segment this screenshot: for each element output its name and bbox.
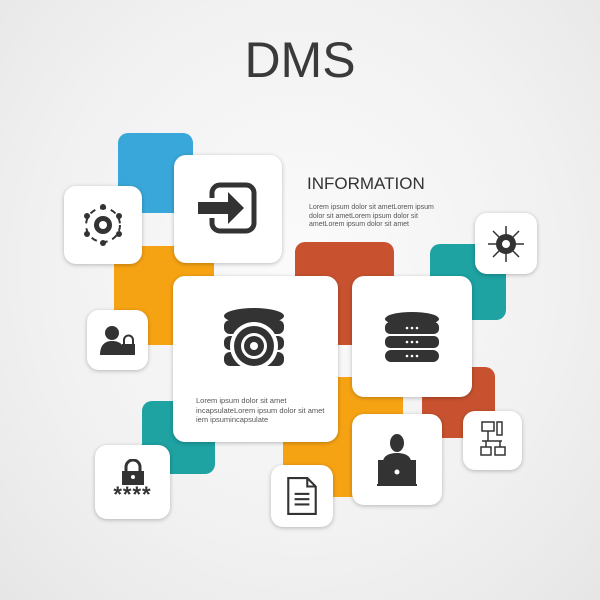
block: teal right <box>430 244 506 320</box>
card: user lock <box>87 310 148 370</box>
block: red top <box>295 242 394 345</box>
card: password lock: **** <box>113 482 152 507</box>
card: main with db gear <box>173 276 338 442</box>
block: teal bottom <box>142 401 215 474</box>
card: password lock <box>95 445 170 519</box>
text: main body: Lorem ipsum dolor sit amet incapsulateLorem ipsum dolor sit amet iem ipsumincapsulate <box>196 396 324 424</box>
block: orange top <box>114 246 214 345</box>
card: database <box>352 276 472 397</box>
card: exit icon <box>174 155 282 263</box>
block: blue <box>118 133 193 213</box>
card: gear circle <box>64 186 142 264</box>
icon: database gear <box>224 308 284 366</box>
text: info body: Lorem ipsum dolor sit ametLorem ipsum dolor sit ametLorem ipsum dolor sit ametLorem ipsum dolor sit amet <box>309 204 434 228</box>
card: hub <box>475 213 537 274</box>
card: network <box>463 411 522 470</box>
card: document <box>271 465 333 527</box>
block: red right <box>422 367 495 438</box>
title: DMS <box>244 32 356 88</box>
block: orange bottom <box>283 377 403 497</box>
heading: information: INFORMATION <box>307 174 425 193</box>
card: laptop user <box>352 414 442 505</box>
